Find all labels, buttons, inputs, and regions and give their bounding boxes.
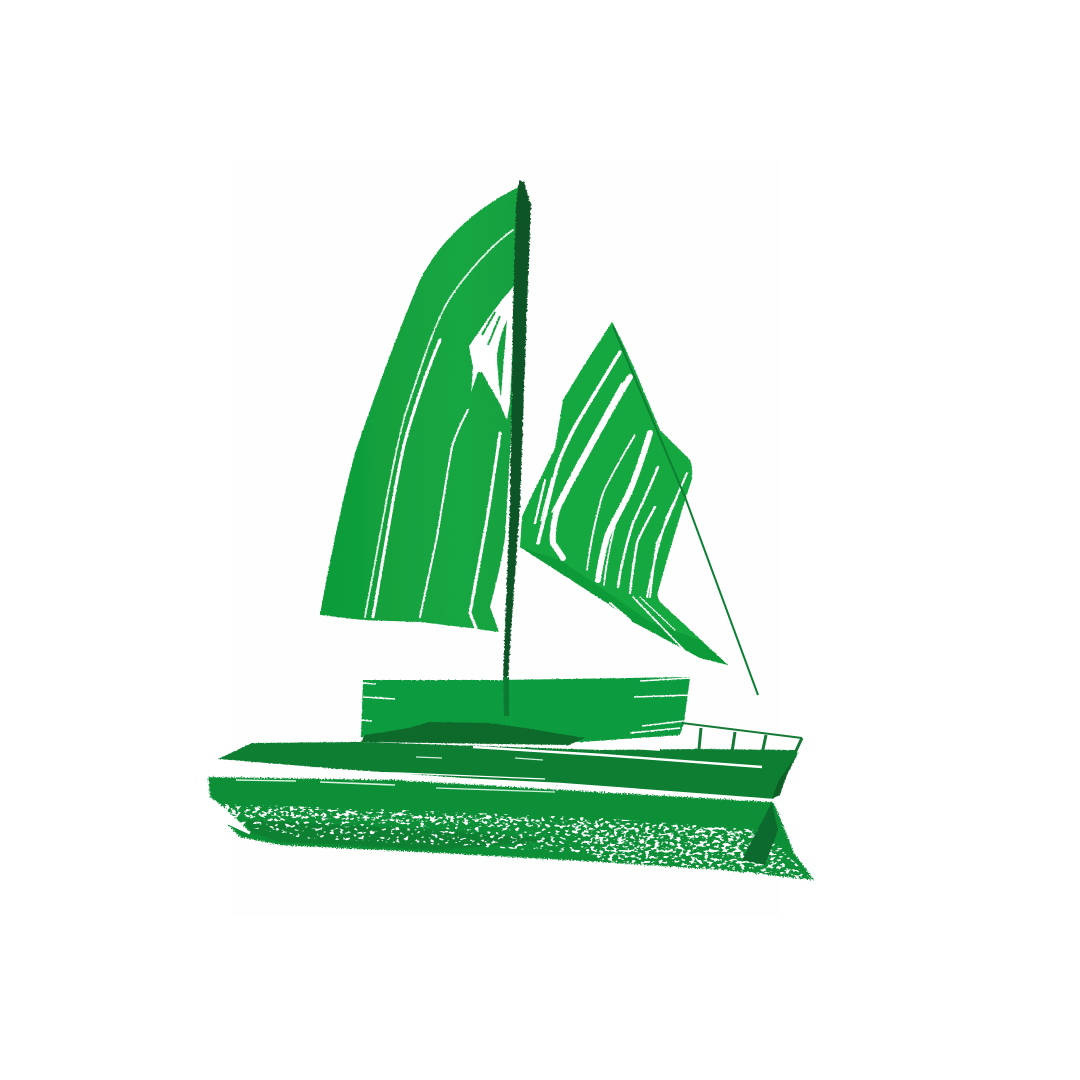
forestay line [613, 326, 758, 695]
main sail white brush gap [469, 286, 514, 420]
cabin white streaks [360, 678, 690, 733]
mast [503, 180, 531, 677]
main sail [320, 186, 521, 632]
main sail white streaks [365, 230, 513, 628]
cabin [360, 677, 690, 742]
hull speckled dry-brush texture [225, 804, 814, 882]
hull white streaks [226, 745, 772, 833]
hull upper plank [218, 742, 798, 799]
mast foot in cabin [503, 677, 509, 716]
jib white streaks [535, 352, 687, 653]
bow shadow [742, 802, 778, 865]
hull [208, 722, 814, 882]
cabin shadow [361, 722, 585, 745]
railing [682, 723, 802, 755]
jib sail [520, 322, 728, 665]
hull lower plank [208, 777, 814, 880]
